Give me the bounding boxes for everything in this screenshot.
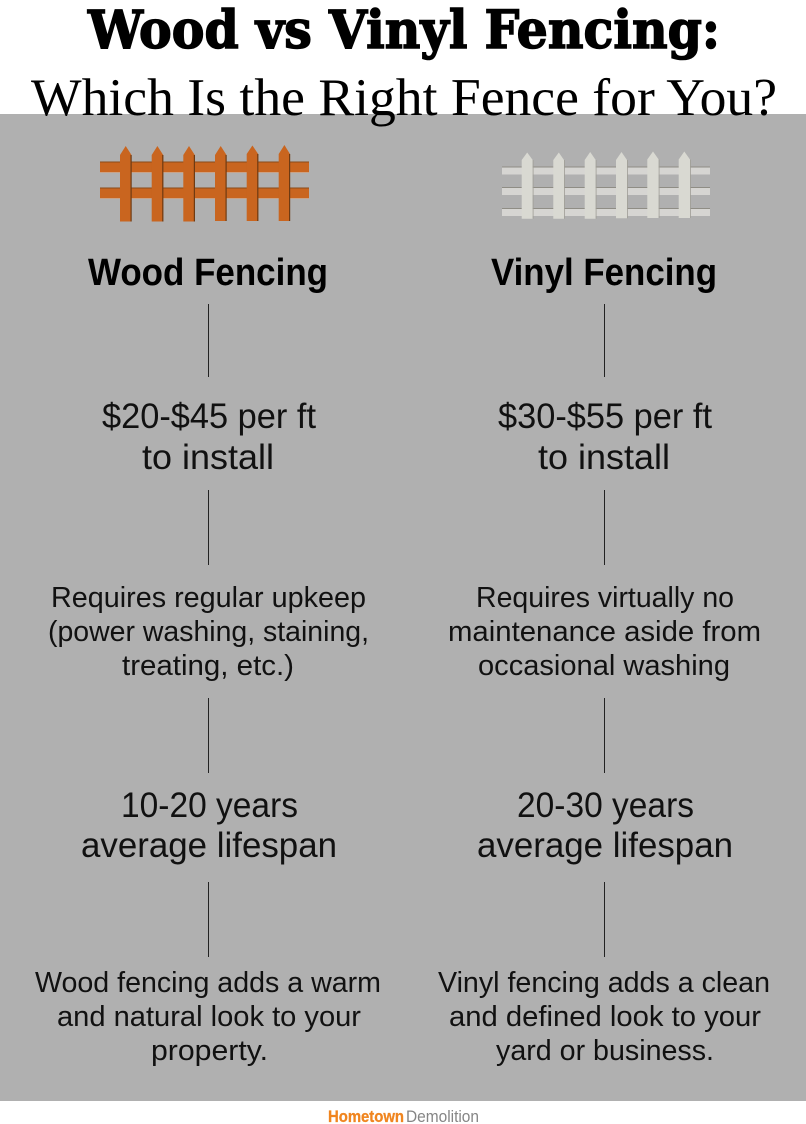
- text: vinyl look: [438, 967, 770, 1067]
- connector line: [208, 698, 209, 773]
- icon: wood fence: [100, 145, 309, 222]
- connector line: [604, 304, 605, 377]
- connector line: [208, 490, 209, 565]
- text: wood look: [35, 967, 381, 1067]
- footer logo: [328, 1107, 479, 1124]
- text: vinyl lifespan: 20-30 years: [517, 786, 694, 825]
- panel: vinyl fencing column: [438, 152, 770, 1067]
- text: wood maintenance: [48, 582, 369, 682]
- text: wood install cost: [102, 397, 316, 477]
- text: vinyl look: yard or business.: [496, 1035, 714, 1067]
- text: vinyl install cost: $30-$55 per ft: [498, 397, 712, 436]
- text: vinyl maintenance: occasional washing: [478, 650, 730, 682]
- text: wood maintenance: Requires regular upkeep: [51, 582, 366, 614]
- connector line: [604, 698, 605, 773]
- text: wood look: Wood fencing adds a warm: [35, 967, 381, 999]
- title: Which Is the Right Fence for You?: [31, 69, 777, 127]
- text: vinyl install cost: [498, 397, 712, 477]
- connector line: [604, 882, 605, 957]
- text: wood install cost: $20-$45 per ft: [102, 397, 316, 436]
- heading: wood fencing: Wood Fencing: [88, 252, 328, 294]
- title: Wood vs Vinyl Fencing:: [87, 0, 720, 61]
- text: wood maintenance: treating, etc.): [122, 650, 294, 682]
- icon: vinyl fence: [502, 152, 710, 219]
- text: wood look: and natural look to your: [57, 1001, 361, 1033]
- text: wood lifespan: 10-20 years: [121, 786, 298, 825]
- text: vinyl look: and defined look to your: [449, 1001, 761, 1033]
- text: wood lifespan: [81, 786, 337, 865]
- text: vinyl maintenance: Requires virtually no: [476, 582, 734, 614]
- text: wood lifespan: average lifespan: [81, 826, 337, 865]
- connector line: [208, 304, 209, 377]
- connector line: [208, 882, 209, 957]
- connector line: [604, 490, 605, 565]
- text: wood maintenance: (power washing, staining,: [48, 616, 369, 648]
- heading: vinyl fencing: Vinyl Fencing: [491, 252, 717, 294]
- text: vinyl install cost: to install: [538, 438, 670, 477]
- text: vinyl lifespan: [477, 786, 733, 865]
- text: wood look: property.: [151, 1035, 268, 1067]
- text: wood install cost: to install: [142, 438, 274, 477]
- text: vinyl look: Vinyl fencing adds a clean: [438, 967, 770, 999]
- panel: wood fencing column: [35, 145, 381, 1067]
- title: [31, 0, 777, 127]
- text: vinyl maintenance: [448, 582, 761, 682]
- text: vinyl lifespan: average lifespan: [477, 826, 733, 865]
- text: vinyl maintenance: maintenance aside from: [448, 616, 761, 648]
